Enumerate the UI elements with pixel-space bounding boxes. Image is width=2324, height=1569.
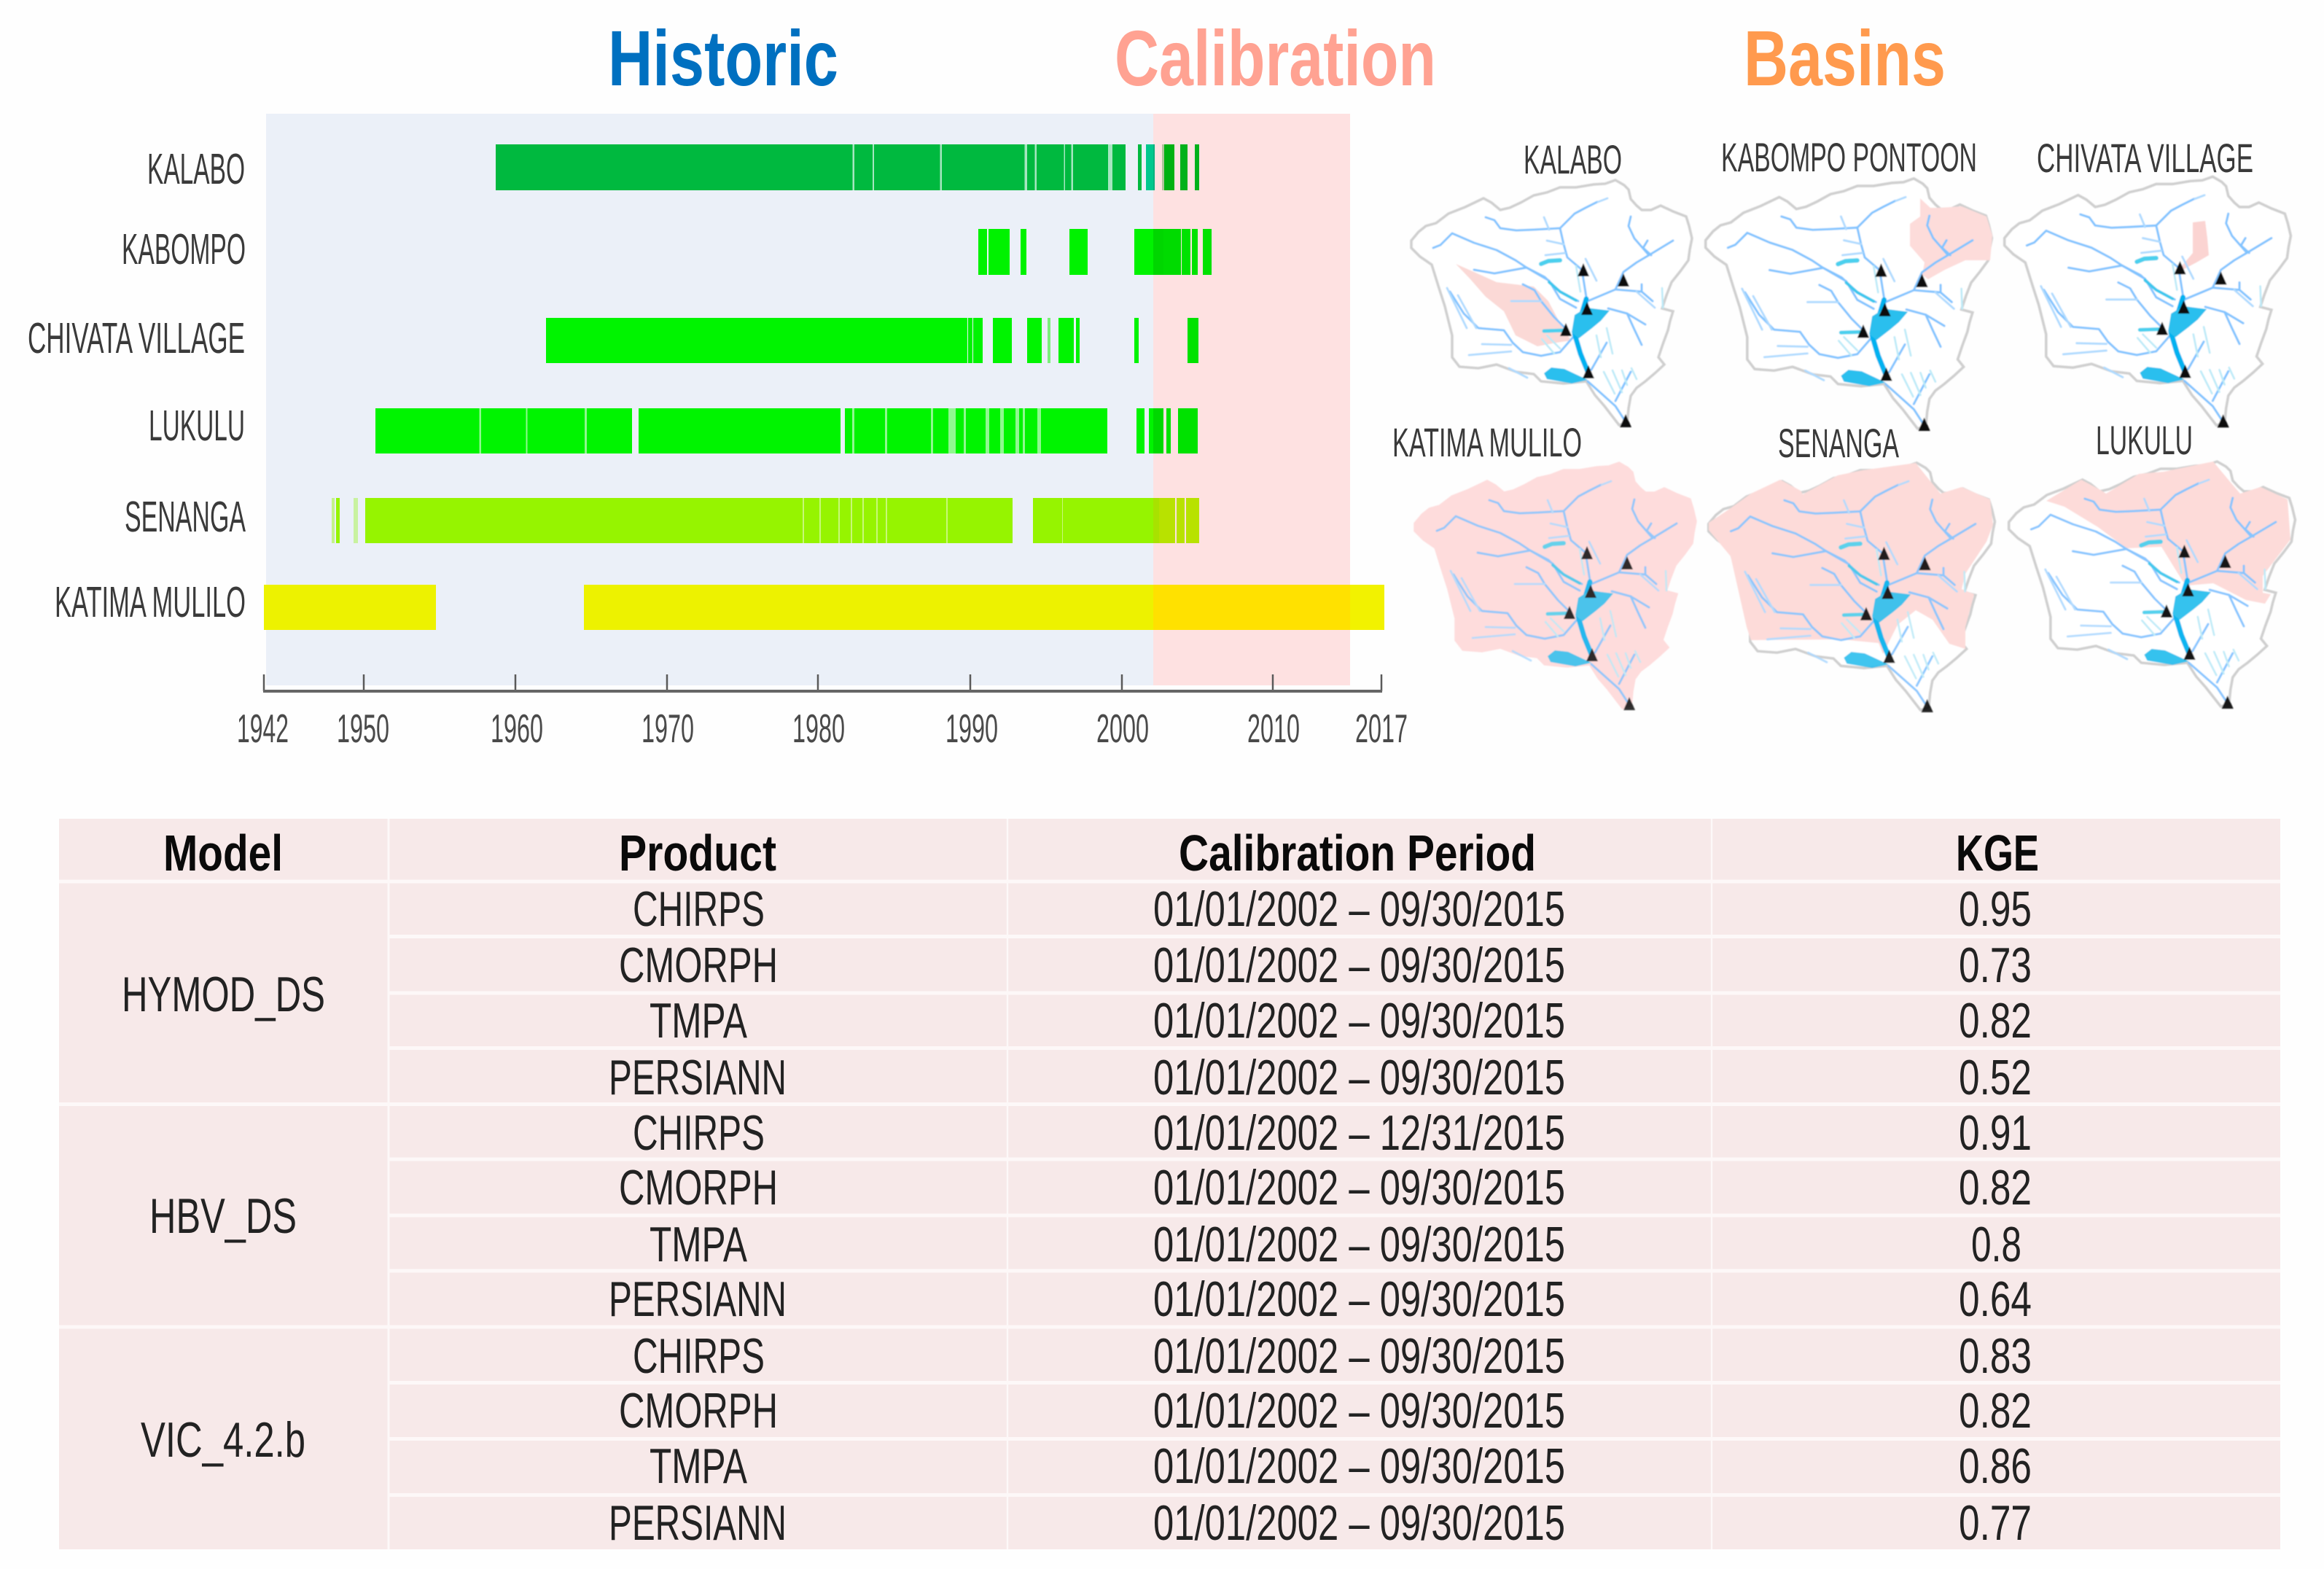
table header: Calibration Period xyxy=(1179,825,1536,881)
product column: PERSIANN xyxy=(609,1050,787,1105)
axis: years 1942 to 2017: 1970 xyxy=(642,706,694,751)
product column: CHIRPS xyxy=(633,881,765,937)
labels: station names xyxy=(28,145,246,626)
labels: station names: KALABO xyxy=(147,145,245,193)
KGE column: 0.82 xyxy=(1959,993,2032,1048)
table header: KGE xyxy=(1956,825,2039,881)
axis: years 1942 to 2017: 1950 xyxy=(337,706,389,751)
KGE column: 0.52 xyxy=(1959,1050,2032,1105)
product column: TMPA xyxy=(650,1438,747,1494)
calibration period column: 01/01/2002 – 09/30/2015 xyxy=(1153,1438,1565,1494)
map: Chivata Village basin xyxy=(2005,176,2290,427)
table header: Model xyxy=(163,825,283,881)
KGE column: 0.82 xyxy=(1959,1160,2032,1215)
axis: years 1942 to 2017: 1980 xyxy=(792,706,845,751)
map label: Kabompo Pontoon: KABOMPO PONTOON xyxy=(1721,134,1977,180)
calibration period column: 01/01/2002 – 09/30/2015 xyxy=(1153,1495,1565,1551)
calibration period column: 01/01/2002 – 09/30/2015 xyxy=(1153,1272,1565,1327)
KGE column xyxy=(1959,881,2032,1551)
bar series: Kalabo xyxy=(496,144,1199,190)
product column: TMPA xyxy=(650,1217,747,1272)
bar series: Kabompo xyxy=(978,229,1212,275)
panel: historic period background xyxy=(266,114,1153,685)
model names: VIC_4.2.b xyxy=(141,1412,305,1468)
labels: station names: KATIMA MULILO xyxy=(55,578,246,626)
chart: station record timeline xyxy=(264,114,1384,685)
table background xyxy=(59,819,2280,1549)
axis: years 1942 to 2017: 1942 xyxy=(237,706,289,751)
table header xyxy=(163,825,2039,881)
map label: Kalabo: KALABO xyxy=(1524,136,1622,182)
calibration period column: 01/01/2002 – 12/31/2015 xyxy=(1153,1105,1565,1161)
labels: station names: CHIVATA VILLAGE xyxy=(28,314,245,362)
bar series: Lukulu xyxy=(375,408,1198,453)
map: Kalabo basin xyxy=(1411,180,1692,427)
bar series: Senanga xyxy=(332,498,1199,543)
axis: years 1942 to 2017: 1960 xyxy=(491,706,543,751)
labels: station names: LUKULU xyxy=(149,402,245,450)
model names: HBV_DS xyxy=(149,1188,297,1244)
calibration period shading xyxy=(1153,114,1350,685)
calibration period column: 01/01/2002 – 09/30/2015 xyxy=(1153,1160,1565,1215)
map label: Senanga: SENANGA xyxy=(1778,420,1899,466)
product column: TMPA xyxy=(650,993,747,1048)
KGE column: 0.86 xyxy=(1959,1438,2032,1494)
product column xyxy=(609,881,787,1551)
title: Basins: Basins xyxy=(1744,14,1946,102)
bar series: Chivata Village xyxy=(546,318,1198,363)
calibration period column: 01/01/2002 – 09/30/2015 xyxy=(1153,881,1565,937)
calibration period column: 01/01/2002 – 09/30/2015 xyxy=(1153,1217,1565,1272)
KGE column: 0.83 xyxy=(1959,1328,2032,1384)
axis: years 1942 to 2017: 2000 xyxy=(1096,706,1149,751)
product column: PERSIANN xyxy=(609,1495,787,1551)
map label: Lukulu: LUKULU xyxy=(2096,417,2193,463)
calibration period column: 01/01/2002 – 09/30/2015 xyxy=(1153,938,1565,993)
map: Katima Mulilo basin xyxy=(1415,463,1696,710)
calibration period column: 01/01/2002 – 09/30/2015 xyxy=(1153,1383,1565,1438)
axis: years 1942 to 2017: 1990 xyxy=(945,706,998,751)
map: Senanga basin xyxy=(1709,463,1994,712)
KGE column: 0.77 xyxy=(1959,1495,2032,1551)
table: calibration results xyxy=(59,819,2280,1551)
labels: station names: SENANGA xyxy=(125,493,246,541)
model names: HYMOD_DS xyxy=(122,967,325,1022)
product column: CMORPH xyxy=(619,1383,778,1438)
bar series: Katima Mulilo xyxy=(264,585,1384,630)
calibration period column: 01/01/2002 – 09/30/2015 xyxy=(1153,1050,1565,1105)
model names xyxy=(122,967,325,1468)
product column: CHIRPS xyxy=(633,1328,765,1384)
map: Lukulu basin xyxy=(2009,462,2295,709)
KGE column: 0.8 xyxy=(1971,1217,2021,1272)
axis: years 1942 to 2017: 2010 xyxy=(1247,706,1300,751)
product column: CMORPH xyxy=(619,938,778,993)
axis: years 1942 to 2017: 2017 xyxy=(1355,706,1408,751)
table header: Product xyxy=(619,825,776,881)
KGE column: 0.64 xyxy=(1959,1272,2032,1327)
calibration period column: 01/01/2002 – 09/30/2015 xyxy=(1153,1328,1565,1384)
map label: Katima Mulilo: KATIMA MULILO xyxy=(1392,419,1582,465)
KGE column: 0.82 xyxy=(1959,1383,2032,1438)
labels: station names: KABOMPO xyxy=(122,225,246,273)
title: Calibration: Calibration xyxy=(1115,14,1436,102)
product column: PERSIANN xyxy=(609,1272,787,1327)
KGE column: 0.91 xyxy=(1959,1105,2032,1161)
map: Kabompo Pontoon basin xyxy=(1706,179,1992,431)
product column: CMORPH xyxy=(619,1160,778,1215)
axis: years 1942 to 2017 xyxy=(237,674,1408,751)
KGE column: 0.73 xyxy=(1959,938,2032,993)
title: Historic: Historic xyxy=(608,14,838,102)
product column: CHIRPS xyxy=(633,1105,765,1161)
KGE column: 0.95 xyxy=(1959,881,2032,937)
calibration period column xyxy=(1153,881,1565,1551)
calibration period column: 01/01/2002 – 09/30/2015 xyxy=(1153,993,1565,1048)
